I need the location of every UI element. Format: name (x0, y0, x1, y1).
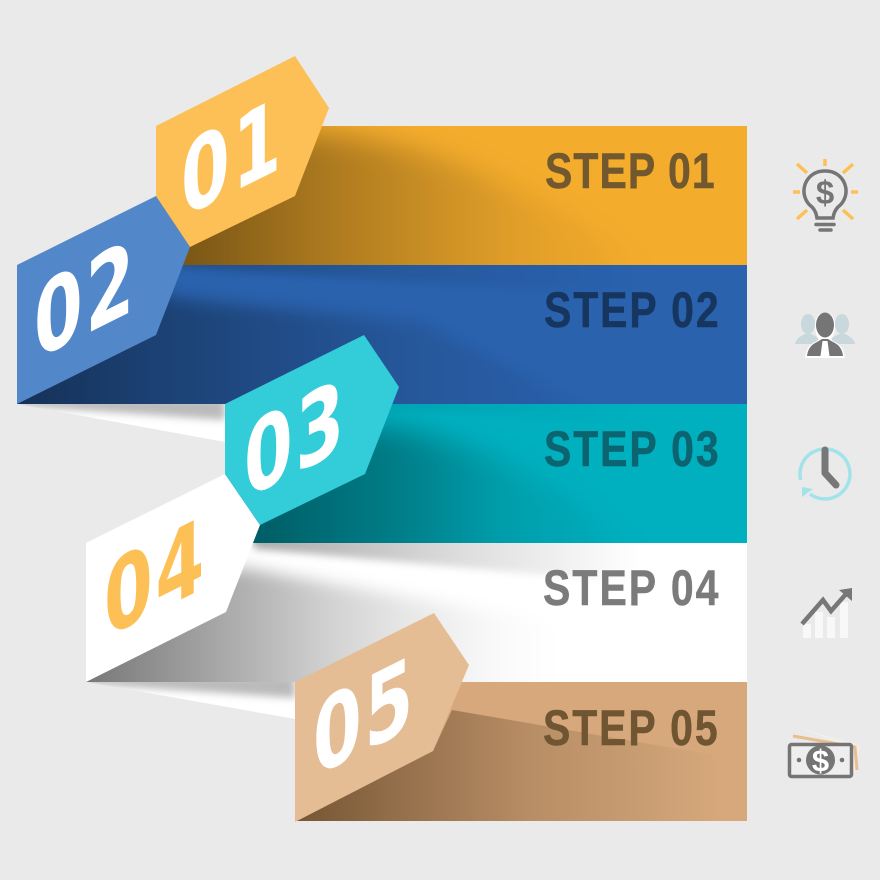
band: step 01 (156, 126, 747, 265)
tag: 03: 03 (244, 356, 347, 524)
label: step 02: STEP 02 (544, 282, 719, 338)
icon: growth chart (802, 588, 852, 638)
label: step 05: STEP 05 (543, 700, 718, 756)
icon: light bulb with dollar: $ (816, 174, 834, 211)
label: step 03: STEP 03 (544, 421, 719, 477)
tag: 04 (86, 474, 260, 682)
wedge under step 04 (88, 682, 295, 719)
icon: light bulb with dollar (793, 159, 858, 230)
icon: banknotes: $ (812, 743, 829, 778)
icon: team of people (795, 312, 855, 358)
band: step 05 (295, 682, 747, 821)
tag: 05: 05 (313, 634, 416, 802)
tag: 05 (295, 613, 469, 822)
label: step 01: STEP 01 (545, 143, 715, 199)
icon: banknotes (790, 728, 860, 778)
band: step 03 (225, 404, 747, 543)
band: step 02 (17, 265, 747, 404)
tag: 02 (17, 196, 190, 404)
label: step 04: STEP 04 (543, 560, 719, 616)
band: step 04 (86, 543, 747, 682)
icon: clock with return arrow (800, 449, 850, 499)
tag: 02: 02 (34, 217, 137, 385)
wedge under step 02 (20, 404, 225, 442)
tag: 01 (156, 56, 329, 247)
tag: 01: 01 (181, 75, 284, 243)
tag: 04: 04 (104, 495, 207, 663)
step labels (543, 143, 719, 756)
tag: 03 (225, 335, 399, 525)
